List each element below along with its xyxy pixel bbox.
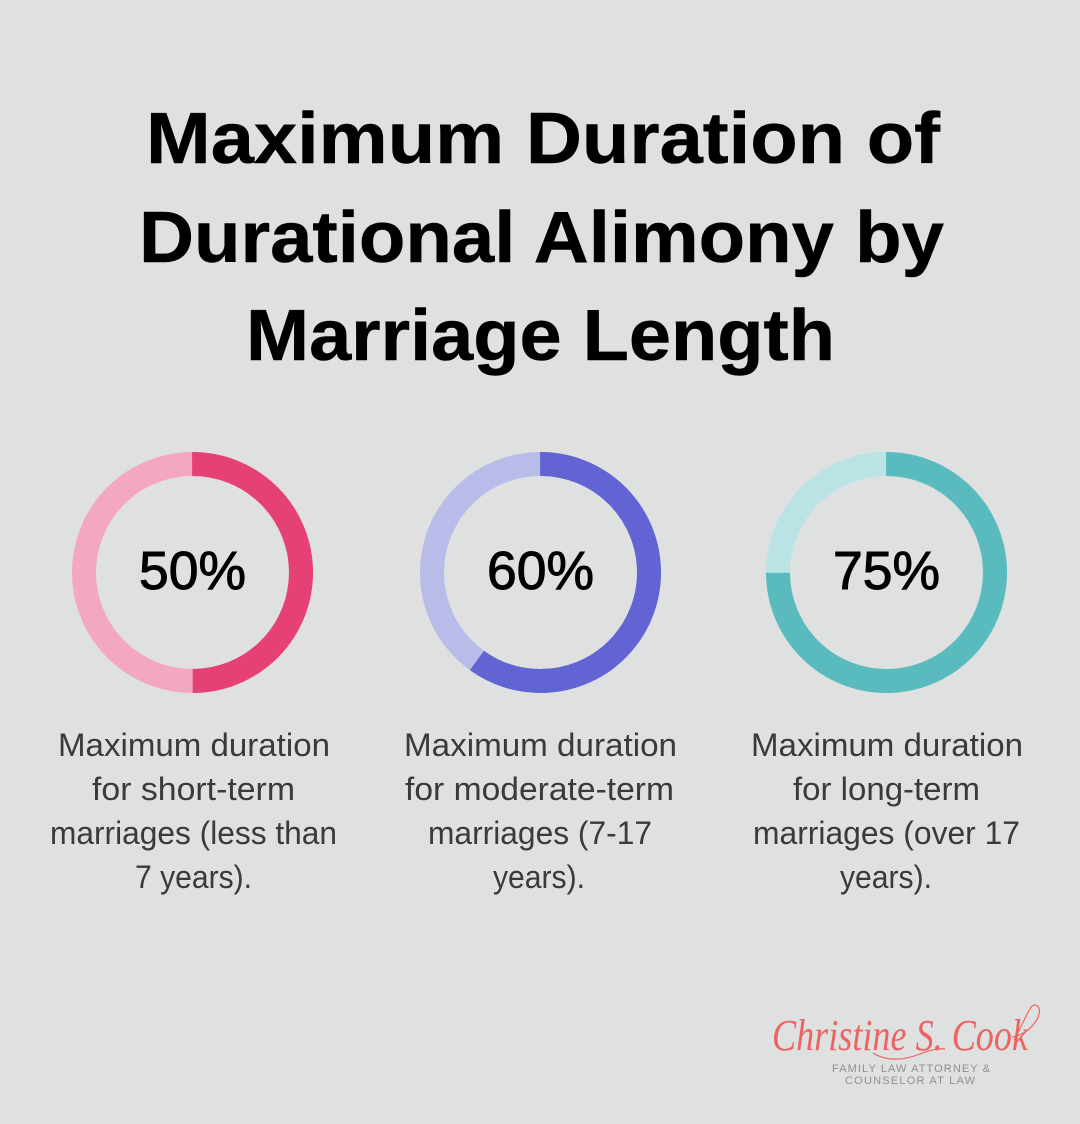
logo: Christine S. Cook: COUNSELOR AT LAW [845, 1075, 976, 1087]
donut chart: 50% [84, 464, 301, 681]
description: short-term: marriages (less than [50, 815, 337, 851]
description: long-term: marriages (over 17 [753, 815, 1020, 851]
donut chart: 75% [778, 464, 995, 681]
panel: short-term marriages [50, 464, 337, 895]
description: short-term: for short-term [92, 771, 295, 807]
value: 60%: 60% [487, 541, 594, 601]
logo: Christine S. Cook: FAMILY LAW ATTORNEY & [832, 1063, 991, 1075]
panel: moderate-term marriages [404, 464, 677, 895]
value: 50%: 50% [139, 541, 246, 601]
description: short-term: 7 years). [135, 859, 252, 895]
title: Maximum Duration of [146, 99, 941, 179]
description: long-term [751, 727, 1023, 895]
logo: Christine S. Cook: Christine S. Cook [772, 1011, 1029, 1060]
logo: Christine S. Cook [772, 1005, 1039, 1087]
description: moderate-term: years). [493, 859, 585, 895]
title: Marriage Length [246, 296, 835, 376]
description: moderate-term [404, 727, 677, 895]
description: long-term: years). [840, 859, 932, 895]
description: long-term: Maximum duration [751, 727, 1023, 763]
description: moderate-term: Maximum duration [404, 727, 677, 763]
value: 75%: 75% [833, 541, 940, 601]
description: moderate-term: for moderate-term [405, 771, 674, 807]
title [139, 99, 944, 376]
donut chart: 60% [432, 464, 649, 681]
description: short-term [50, 727, 337, 895]
title: Durational Alimony by [139, 198, 944, 278]
description: moderate-term: marriages (7-17 [428, 815, 652, 851]
description: long-term: for long-term [793, 771, 980, 807]
description: short-term: Maximum duration [58, 727, 330, 763]
panel: long-term marriages [751, 464, 1023, 895]
